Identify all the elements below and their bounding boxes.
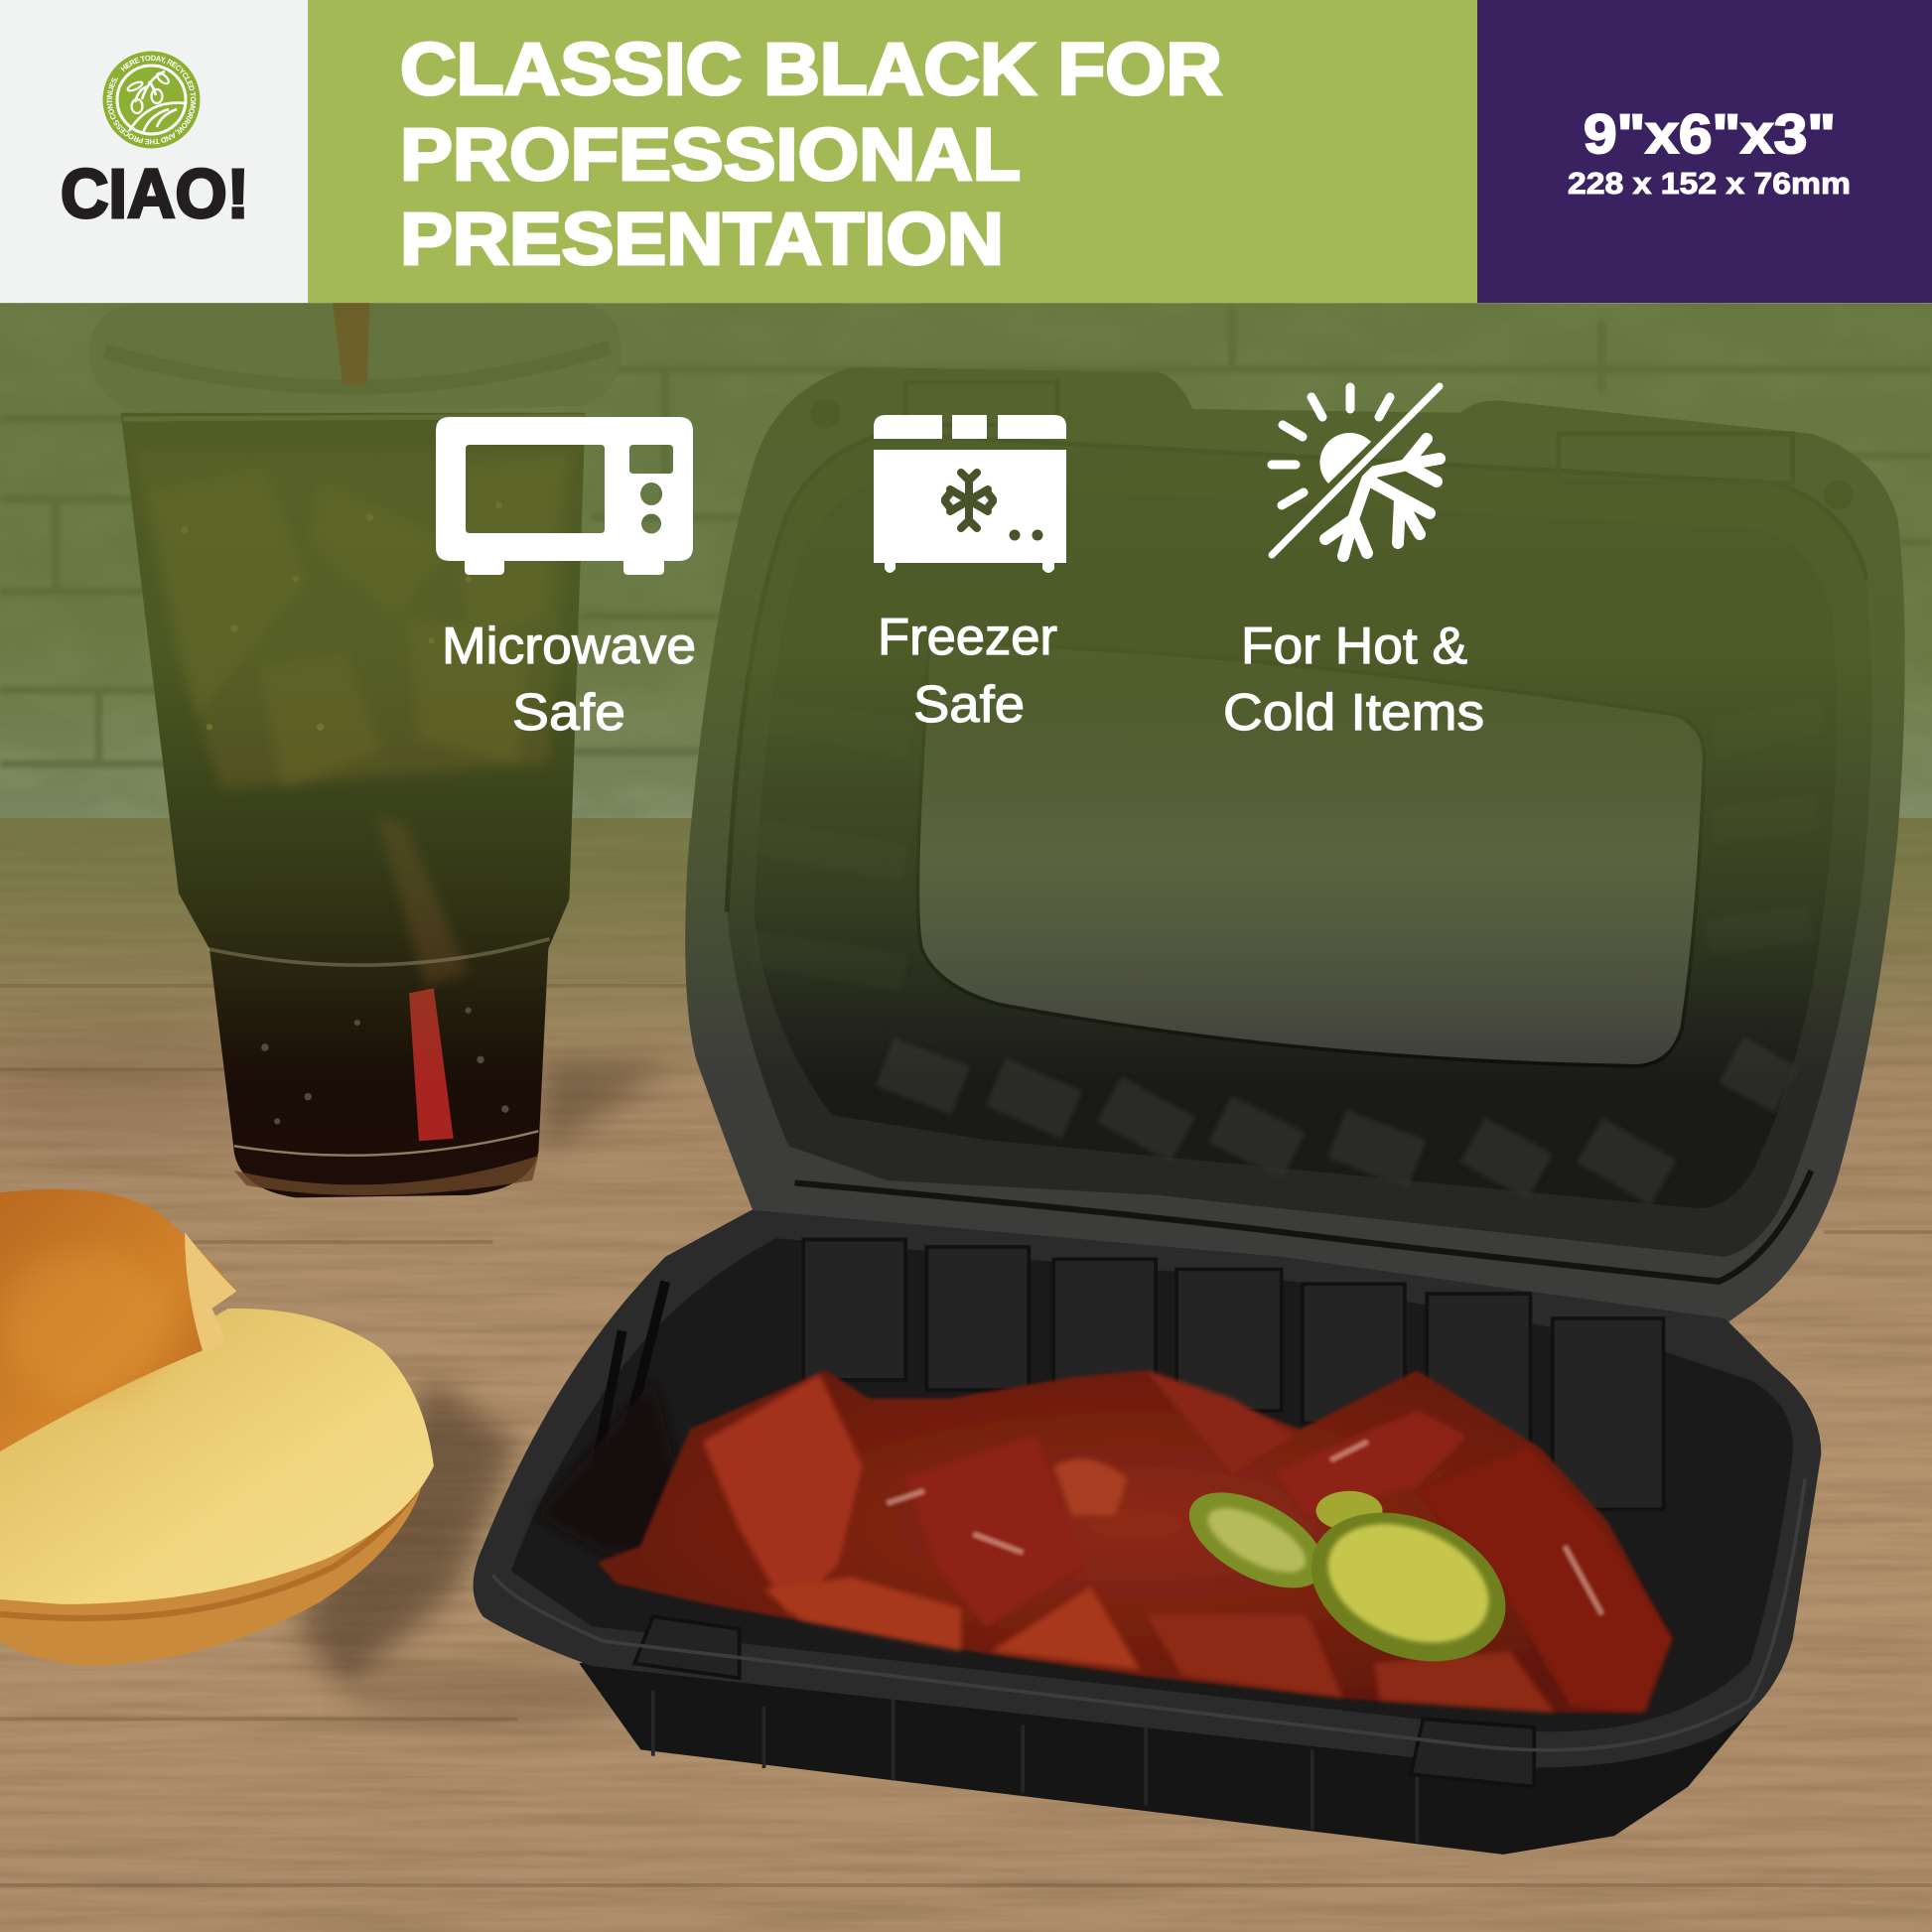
label: Freezer — [878, 609, 1057, 666]
label: Safe — [913, 676, 1025, 734]
clamshell container — [474, 367, 1905, 1855]
drink cup — [88, 303, 622, 1197]
ribs with BBQ sauce — [536, 1370, 1672, 1713]
round badge icon: HERE TODAY, RECYCLED TOMORROW, AND THE PROCESS CONTINUES. — [107, 56, 197, 145]
container lid — [685, 367, 1905, 1324]
header bar — [0, 0, 1932, 303]
headline: CLASSIC BLACK FOR — [400, 28, 1222, 110]
feature: microwave safe — [436, 417, 696, 742]
label: Microwave — [442, 618, 696, 675]
label — [878, 609, 1057, 734]
wooden table — [0, 818, 1932, 1932]
icon: microwave — [436, 417, 693, 575]
headline: PROFESSIONAL — [400, 113, 1021, 196]
label — [442, 618, 696, 742]
headline: PRESENTATION — [400, 198, 1004, 280]
dimensions panel — [1477, 0, 1932, 303]
logo panel — [0, 0, 308, 303]
pickle slices — [1174, 1473, 1528, 1689]
headline — [400, 28, 1222, 280]
label: Cold Items — [1223, 684, 1484, 742]
icon: sun and snowflake — [1272, 386, 1440, 556]
icon: freezer — [874, 415, 1066, 573]
container base — [474, 1210, 1821, 1855]
label: Safe — [512, 684, 625, 742]
brick wall — [0, 296, 1932, 826]
label: For Hot & — [1241, 618, 1467, 675]
label — [1223, 618, 1484, 742]
headline panel — [308, 0, 1477, 303]
size in millimetres: 228 x 152 x 76mm — [1568, 166, 1851, 201]
CIAO wordmark: CIAO! — [61, 155, 249, 232]
feature: for hot and cold items — [1223, 386, 1484, 742]
size in inches: 9"x6"x3" — [1584, 102, 1836, 165]
green gradient overlay — [0, 303, 1932, 1092]
burger bun — [0, 1189, 434, 1666]
feature: freezer safe — [874, 415, 1066, 734]
